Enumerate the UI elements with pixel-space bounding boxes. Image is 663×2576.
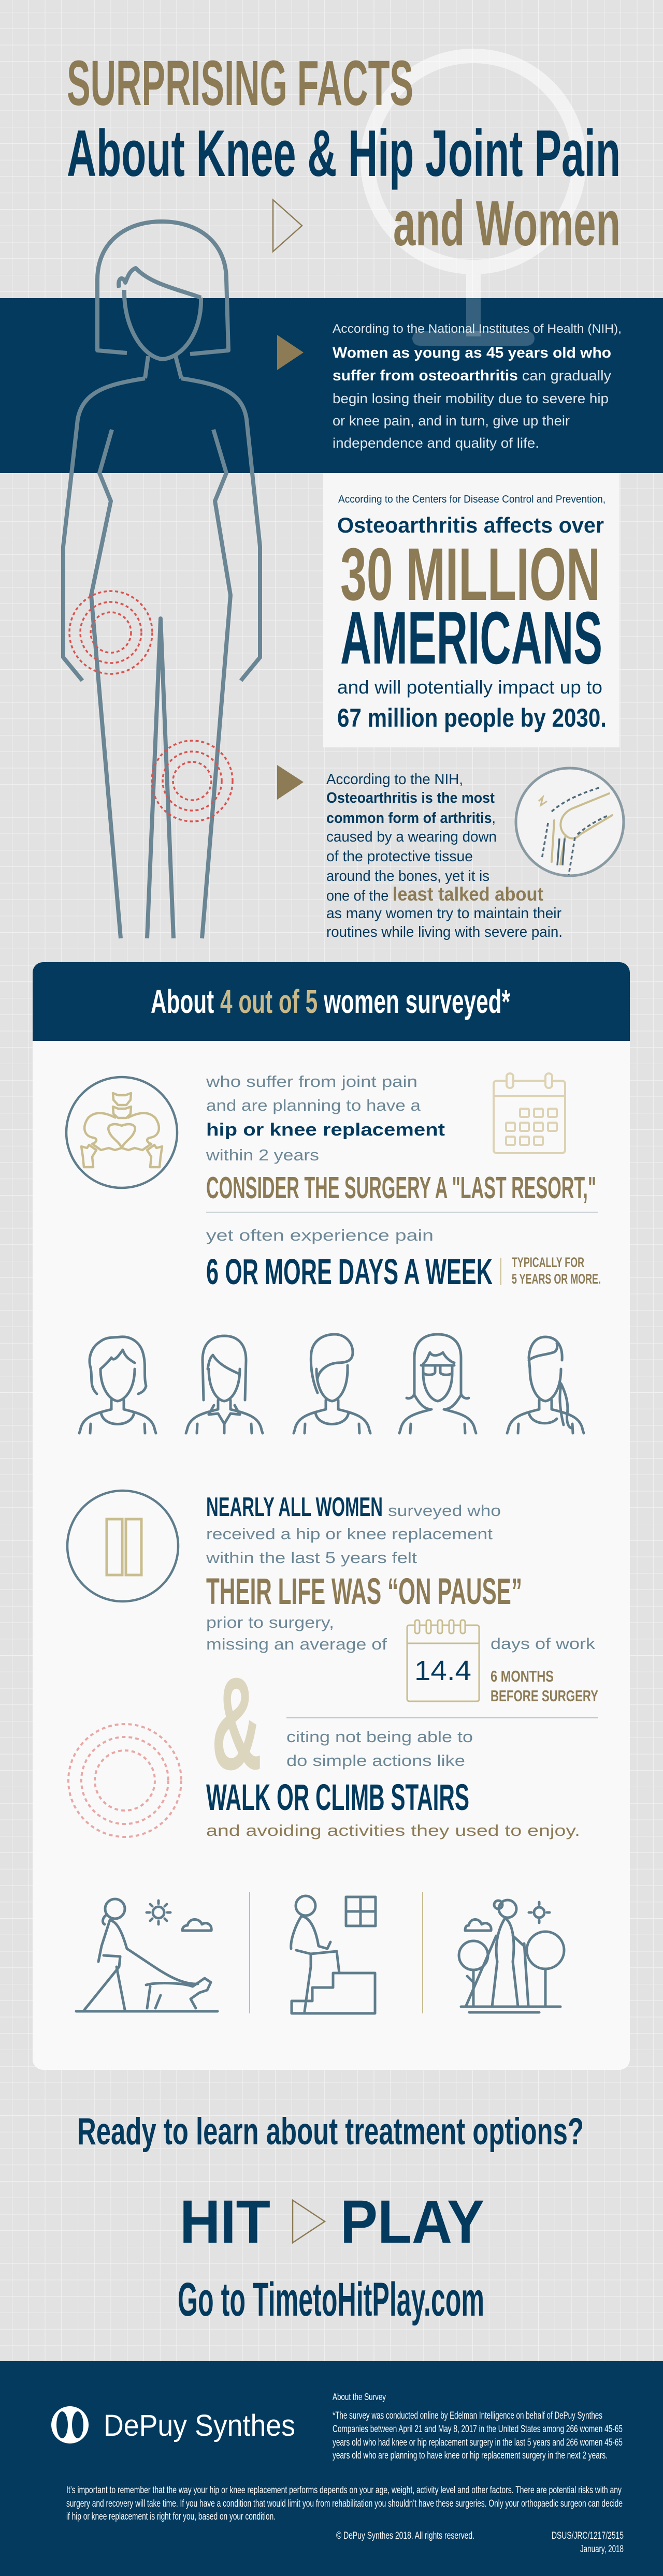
icon: woman bob with collar [186, 1336, 263, 1433]
text block: pain days: TYPICALLY FOR [512, 1255, 584, 1270]
text block: days of work: BEFORE SURGERY [491, 1687, 598, 1705]
text block: life on pause: received a hip or knee replacement [206, 1525, 493, 1543]
text block: life on pause [206, 1492, 522, 1653]
panel: CDC stat box: According to the Centers for Disease Control and Prevention, [338, 494, 606, 505]
text block: osteoarthritis most common: Osteoarthritis is the most [326, 790, 495, 806]
card header: About 4 out of 5 women surveyed* [151, 983, 510, 1020]
text block: NIH fact: independence and quality of life. [333, 435, 539, 451]
text block: walk or climb stairs: citing not being able to [286, 1728, 473, 1746]
panel: NIH navy band [0, 298, 663, 473]
text block: days of work: 6 MONTHS [491, 1667, 554, 1685]
text block: life on pause: missing an average of [206, 1635, 387, 1653]
text block: osteoarthritis most common: routines while living with severe pain. [326, 924, 563, 940]
text block: life on pause: surveyed who [388, 1502, 501, 1520]
panel: survey card [33, 962, 630, 2070]
icon: walking the dog [76, 1899, 218, 2011]
text block: osteoarthritis most common [326, 771, 563, 940]
icon: knee pain rings [152, 741, 233, 821]
panel: CDC stat box: 67 million people by 2030. [337, 703, 607, 732]
logo: HIT PLAY: PLAY [340, 2188, 484, 2256]
text block: NIH fact [333, 322, 622, 451]
text block: planning replacement [206, 1072, 445, 1164]
icon: female symbol [368, 56, 579, 298]
text block: planning replacement: hip or knee replacement [206, 1120, 445, 1140]
text block: planning replacement: who suffer from joint pain [206, 1072, 417, 1091]
logo: DePuy Synthes [51, 2406, 295, 2443]
text block: pain days: yet often experience pain [206, 1226, 434, 1244]
text block: NIH fact: suffer from osteoarthritis can gradually [333, 367, 611, 384]
text block: days of work: days of work [491, 1635, 596, 1653]
text block: planning replacement: within 2 years [206, 1146, 319, 1164]
text block: osteoarthritis most common: as many women try to maintain their [326, 905, 561, 922]
icon: woman long hair glasses [399, 1334, 476, 1433]
icon: woman curly hair [79, 1337, 156, 1433]
icon: climbing stairs [291, 1896, 376, 2013]
icon: woman short side-swept [294, 1334, 370, 1433]
text block: osteoarthritis most common: common form of arthritis, [326, 810, 496, 827]
text block: walk or climb stairs [206, 1728, 580, 1839]
icon: calendar [494, 1073, 565, 1153]
text block: walk or climb stairs: WALK OR CLIMB STAIRS [206, 1777, 469, 1818]
icon row: five women [79, 1334, 584, 1433]
icon: pause circle [67, 1491, 178, 1601]
card header [33, 962, 630, 1041]
icon: gold triangle [277, 335, 304, 370]
text block: pain days [206, 1226, 601, 1292]
icon: calendar 14.4 [407, 1620, 479, 1701]
text block: disclaimer: January, 2018 [580, 2544, 624, 2555]
text block: disclaimer [66, 2485, 624, 2555]
icon: outline play triangle [273, 200, 302, 252]
logo: HIT PLAY [180, 2188, 484, 2256]
text block: NIH fact: Women as young as 45 years old who [333, 345, 611, 361]
icon: calendar 14.4: 14.4 [414, 1655, 471, 1686]
text block: NIH fact: According to the National Institutes of Health (NIH), [333, 322, 622, 336]
text block: about the survey: About the Survey [333, 2392, 386, 2402]
text block: walk or climb stairs: do simple actions like [286, 1751, 465, 1770]
icon: woman ponytail [507, 1337, 584, 1433]
text block: about the survey [333, 2392, 623, 2461]
icon: hip pain rings [69, 591, 152, 674]
text block: disclaimer: DSUS/JRC/1217/2515 [552, 2530, 624, 2541]
icon: pain rings pink [68, 1724, 181, 1837]
text block: disclaimer: © DePuy Synthes 2018. All rights reserved. [336, 2530, 474, 2541]
icon: hiking with poles [459, 1900, 564, 2012]
logo: HIT PLAY: HIT [180, 2188, 270, 2256]
icon: pelvis [66, 1077, 177, 1188]
text block: days of work [491, 1635, 598, 1705]
title [67, 48, 621, 259]
text block: osteoarthritis most common: According to the NIH, [326, 771, 463, 788]
text block: life on pause: within the last 5 years felt [206, 1549, 417, 1567]
text block: osteoarthritis most common: around the bones, yet it is [326, 868, 489, 885]
text block: NIH fact: or knee pain, and in turn, give up their [333, 413, 570, 429]
text block: pain days: 5 YEARS OR MORE. [512, 1271, 601, 1287]
text block: walk or climb stairs: and avoiding activities they used to enjoy. [206, 1821, 580, 1839]
text block: osteoarthritis most common: of the protective tissue [326, 848, 473, 865]
icon: big ampersand: & [211, 1650, 262, 1798]
text block: NIH fact: begin losing their mobility due to severe hip [333, 391, 609, 406]
panel: CDC stat box [323, 473, 619, 747]
logo: DePuy Synthes: DePuy Synthes [104, 2409, 295, 2442]
text block: disclaimer: if hip or knee replacement is right for you, based on your condition. [66, 2511, 276, 2522]
icon: gold triangle 2 [277, 765, 304, 800]
panel: CDC stat box: and will potentially impact up to [337, 676, 602, 698]
text block: osteoarthritis most common: one of the least talked about [326, 884, 543, 905]
text block: pain days: 6 OR MORE DAYS A WEEK [206, 1252, 493, 1292]
text block: life on pause: NEARLY ALL WOMEN [206, 1492, 383, 1522]
text block: osteoarthritis most common: caused by a wearing down [326, 829, 497, 845]
text block: life on pause: prior to surgery, [206, 1613, 334, 1631]
text block: planning replacement: and are planning to have a [206, 1096, 421, 1114]
panel: footer [0, 2361, 663, 2576]
icon: woman body outline [63, 222, 260, 938]
icon: knee joint circle [516, 768, 624, 876]
panel: CDC stat box: Osteoarthritis affects over [337, 513, 604, 537]
